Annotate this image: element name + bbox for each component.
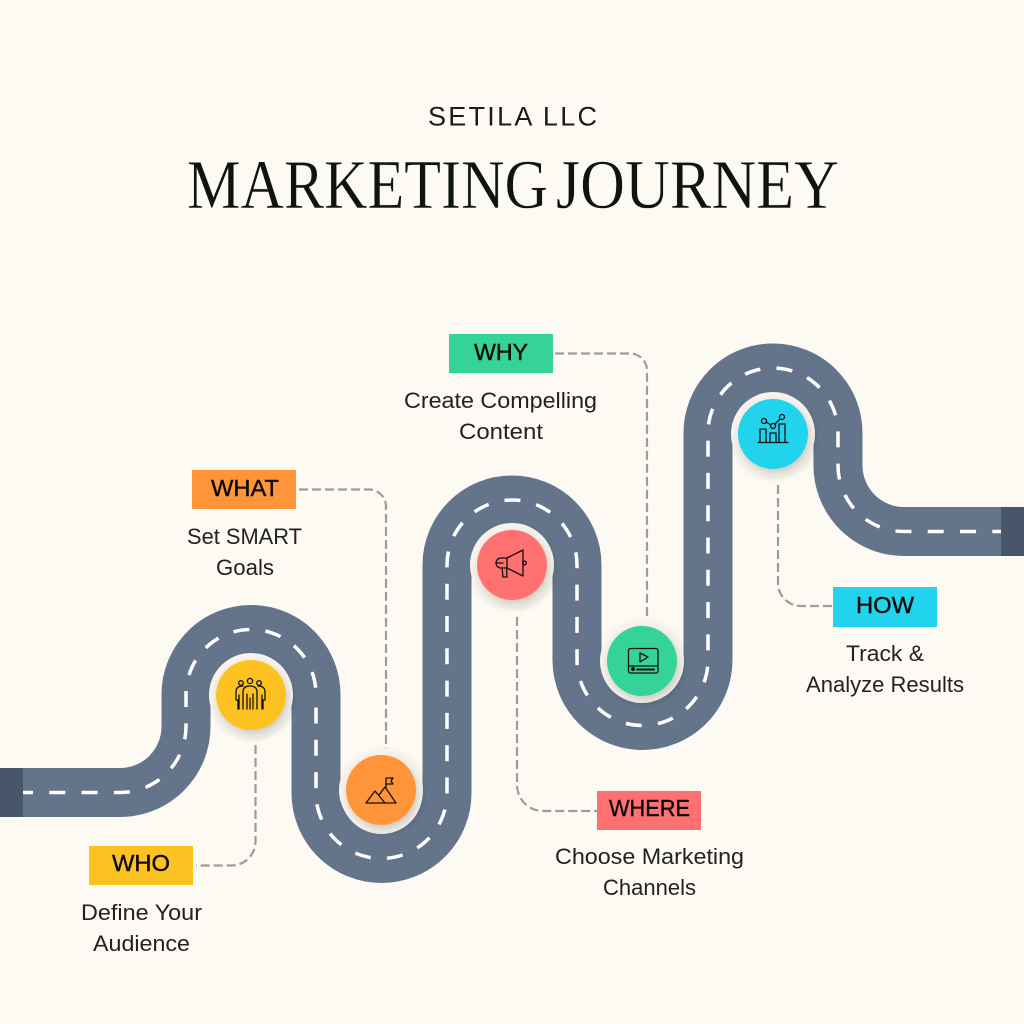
connector: why [555, 354, 647, 622]
label: what: WHAT [211, 475, 279, 501]
connector: where [517, 617, 597, 811]
text: set smart goals: Goals [216, 555, 274, 580]
winding road [0, 368, 1024, 858]
icon: mountain with flag [366, 778, 396, 803]
label: who [89, 846, 193, 885]
road centre line: first section [23, 630, 316, 792]
text: set smart goals: Set SMART [187, 524, 302, 549]
text: track and analyze results [806, 641, 964, 697]
connector: how [778, 485, 833, 606]
text: choose marketing channels [555, 844, 744, 900]
text: create compelling content [404, 388, 597, 444]
icon: bar chart [758, 414, 788, 442]
step 3 node: where [470, 523, 554, 607]
main title [187, 147, 839, 224]
text: define your audience [81, 900, 203, 956]
text: choose marketing channels: Channels [603, 875, 696, 900]
connector: what [299, 490, 386, 750]
road centre line: second section [316, 368, 1001, 858]
icon: megaphone [496, 550, 526, 577]
icon: video player [628, 648, 658, 673]
step 4 node: why [600, 619, 684, 703]
label: where: WHERE [609, 795, 690, 821]
text: choose marketing channels: Choose Marketing [555, 844, 744, 869]
connector: who [196, 745, 256, 866]
icon: people [236, 678, 265, 709]
text: set smart goals [187, 524, 302, 580]
label: where [597, 791, 701, 830]
text: track and analyze results: Track & [846, 641, 924, 666]
text: define your audience: Define Your [81, 900, 203, 925]
step 1 node: who [209, 653, 293, 737]
label: why: WHY [474, 339, 528, 365]
label: how: HOW [856, 592, 915, 618]
label: how [833, 587, 937, 627]
main title: JOURNEY [556, 147, 839, 224]
company name: SETILA LLC [428, 102, 597, 132]
text: track and analyze results: Analyze Results [806, 672, 964, 697]
text: create compelling content: Content [459, 419, 544, 444]
road end cap left [0, 768, 23, 817]
step 2 node: what [339, 748, 423, 832]
label: who: WHO [112, 850, 170, 876]
main title: MARKETING [187, 147, 548, 224]
text: define your audience: Audience [93, 931, 190, 956]
label: what [192, 470, 296, 509]
text: create compelling content: Create Compelling [404, 388, 597, 413]
step 5 node: how [731, 392, 815, 476]
label: why [449, 334, 553, 373]
road end cap right [1001, 507, 1024, 556]
